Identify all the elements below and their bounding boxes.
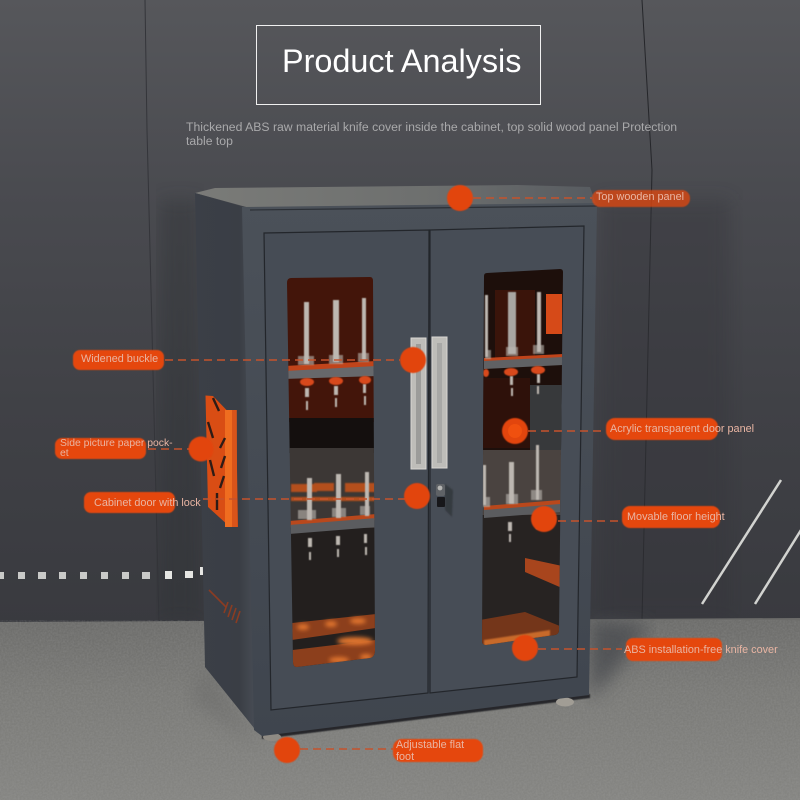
left window contents (287, 277, 375, 667)
callout: acrylic transparent door panel: Acrylic transparent door panel (610, 423, 754, 435)
callout: cabinet door with lock: Cabinet door with lock (94, 497, 201, 509)
subtitle text: Thickened ABS raw material knife cover inside the cabinet, top solid wood panel Protection (186, 120, 677, 134)
title box (256, 26, 540, 104)
callout: side picture paper pocket: Side picture paper pock- (60, 438, 173, 449)
callout: ABS installation-free knife cover (512, 635, 778, 661)
right door (430, 226, 584, 693)
callout: top wooden panel (447, 185, 690, 211)
cabinet base shadow (262, 694, 590, 739)
cabinet side panel (195, 193, 258, 733)
callout: side picture paper pocket: et (60, 448, 69, 459)
callout: widened buckle: Widened buckle (81, 353, 158, 365)
cabinet (195, 185, 597, 741)
callout: adjustable flat foot (274, 737, 483, 763)
callout: movable floor height (531, 506, 725, 532)
callout: top wooden panel: Top wooden panel (596, 191, 684, 203)
callout: acrylic transparent door panel (502, 418, 754, 444)
title text: Product Analysis (282, 43, 521, 79)
orange bracket (546, 294, 562, 334)
subtitle text: table top (186, 134, 233, 148)
lower orange reflections (291, 483, 375, 501)
side vent slits (209, 590, 240, 623)
callout: cabinet door with lock (84, 483, 430, 513)
bottom orange tray (482, 612, 559, 645)
right window contents (482, 269, 563, 645)
bottom orange knife trays (292, 614, 376, 640)
upper shelf (484, 354, 562, 361)
cabinet top surface (195, 185, 596, 208)
background: wall (0, 0, 800, 625)
wall decoration: diagonal white lines (702, 480, 800, 604)
door handles (411, 337, 447, 469)
door lock (436, 484, 453, 517)
lower knives (298, 472, 370, 560)
lower shelf (484, 500, 560, 511)
upper knives (298, 298, 369, 410)
upper knives (485, 292, 544, 396)
lower shelf (289, 514, 376, 527)
orange band (525, 558, 562, 588)
callout: ABS installation-free knife cover: ABS installation-free knife cover (624, 644, 778, 656)
callout: movable floor height: Movable floor height (627, 511, 725, 523)
callout: widened buckle (73, 347, 426, 373)
background: carpet floor (0, 618, 800, 800)
callout: adjustable flat foot: foot (396, 751, 414, 763)
cabinet feet (263, 698, 574, 741)
callout: adjustable flat foot: Adjustable flat (396, 739, 464, 751)
orange side paper pocket (206, 396, 238, 527)
lower knives (483, 445, 542, 542)
cabinet front (242, 203, 597, 736)
callout: side picture paper pocket (55, 436, 214, 462)
left door (264, 230, 429, 710)
upper shelf (285, 361, 376, 375)
wall decoration: white square dots (0, 567, 203, 579)
